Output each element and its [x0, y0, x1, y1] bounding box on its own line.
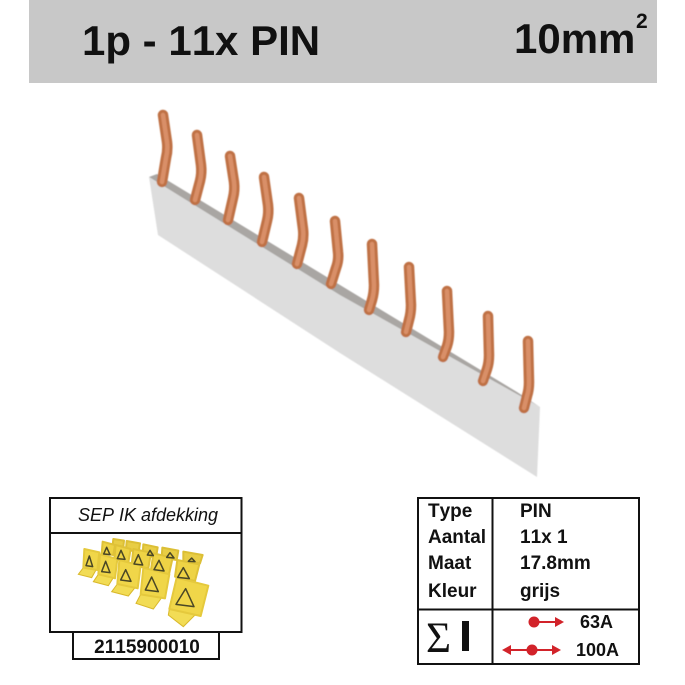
copper pins [162, 115, 529, 408]
back row [113, 539, 203, 563]
sum of current symbol: Σ [426, 615, 451, 662]
header band [29, 0, 657, 83]
cross-section: 10mm [514, 15, 635, 62]
sum of current symbol [426, 615, 469, 662]
panel: SEP IK cover [50, 498, 242, 632]
middle row [102, 542, 199, 581]
article number box [73, 632, 219, 659]
feet [78, 568, 201, 627]
icon: 100A double arrow [502, 644, 561, 656]
63A label: 63A [580, 612, 613, 632]
article number box: 2115900010 [94, 637, 200, 658]
warning triangles [86, 547, 195, 607]
100A label: 100A [576, 640, 619, 660]
cover heading: SEP IK afdekking [78, 505, 218, 525]
front row [83, 549, 208, 616]
busbar photo [149, 115, 540, 477]
spec labels: Kleur [428, 581, 477, 602]
busbar body [149, 177, 540, 477]
spec values: PIN [520, 501, 552, 522]
cross-section: 2 [636, 10, 648, 33]
spec labels: Aantal [428, 527, 486, 548]
icon: 63A arrow [528, 616, 564, 628]
spec values: 17.8mm [520, 553, 591, 574]
busbar top strip [149, 174, 540, 407]
spec values: 11x 1 [520, 527, 568, 548]
title: 1p - 11x PIN [82, 17, 320, 64]
spec labels: Maat [428, 553, 472, 574]
spec labels [428, 501, 486, 602]
spec values: grijs [520, 581, 560, 602]
spec values [520, 501, 591, 602]
panel: specification table [418, 498, 639, 664]
spec labels: Type [428, 501, 472, 522]
yellow cover photo [78, 539, 208, 627]
